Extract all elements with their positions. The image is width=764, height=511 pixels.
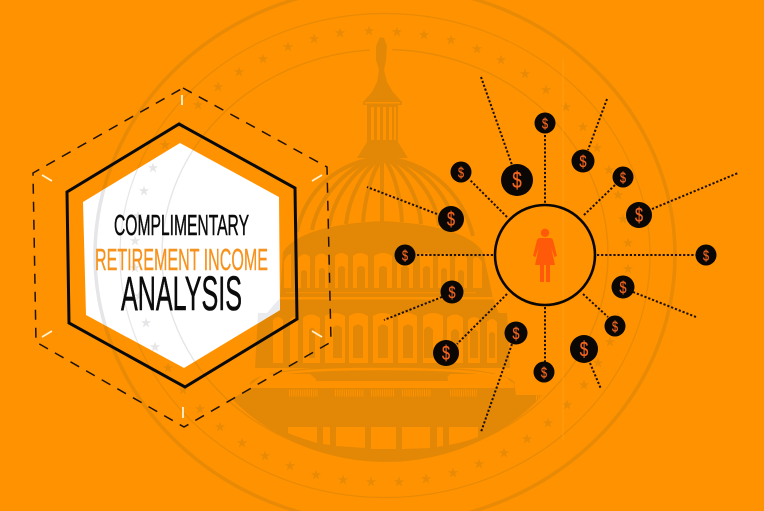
headline text [95,210,268,321]
line: retirement income: RETIREMENT INCOME [95,243,268,277]
coin: $ [620,170,626,186]
coin [501,164,533,196]
coin: $ [447,209,455,231]
dollar coin nodes [394,112,716,382]
coin [612,166,634,188]
faint print guide lines [562,60,564,440]
coin [612,276,634,298]
coin: $ [512,167,522,193]
coin: $ [580,152,587,171]
coin [534,362,554,382]
coin [534,112,556,134]
line: complimentary: COMPLIMENTARY [114,210,249,242]
coin: $ [542,116,548,132]
coin [438,206,464,232]
dome ribs [297,158,473,236]
coin: $ [442,343,450,365]
coin: $ [458,164,464,182]
lantern colonnade [357,105,408,158]
coin [433,340,459,366]
coin: $ [541,364,547,382]
coin: $ [620,278,627,297]
coin [604,316,626,336]
coin [440,280,464,304]
capitol building silhouette [232,37,543,462]
central circle with person [495,205,595,305]
terrace base [232,388,543,462]
statue on top of dome [363,37,402,105]
coin: $ [402,248,408,264]
coin: $ [635,205,643,227]
coin [450,162,472,182]
coin [626,202,652,228]
black hexagon frame [67,124,297,387]
coin: $ [703,248,709,264]
coin: $ [448,283,456,302]
dashed outer hexagon [33,88,331,427]
coin: $ [612,318,618,336]
lower arcade [255,313,510,368]
faint seal and capitol showing through panel [93,150,280,362]
drum and upper arcade [266,221,499,314]
dotted connector lines [367,77,738,432]
coin [394,244,416,266]
coin: $ [512,324,520,343]
white hexagon panel [83,143,280,368]
seal rings and stars [95,0,675,511]
coin [572,150,594,172]
line: analysis: ANALYSIS [121,268,242,321]
coin: $ [580,338,588,362]
lower columns [288,427,478,449]
white corner ticks [42,95,322,418]
coin [696,244,716,266]
icon: woman [533,229,557,282]
coin [504,322,528,344]
coin [570,335,598,363]
